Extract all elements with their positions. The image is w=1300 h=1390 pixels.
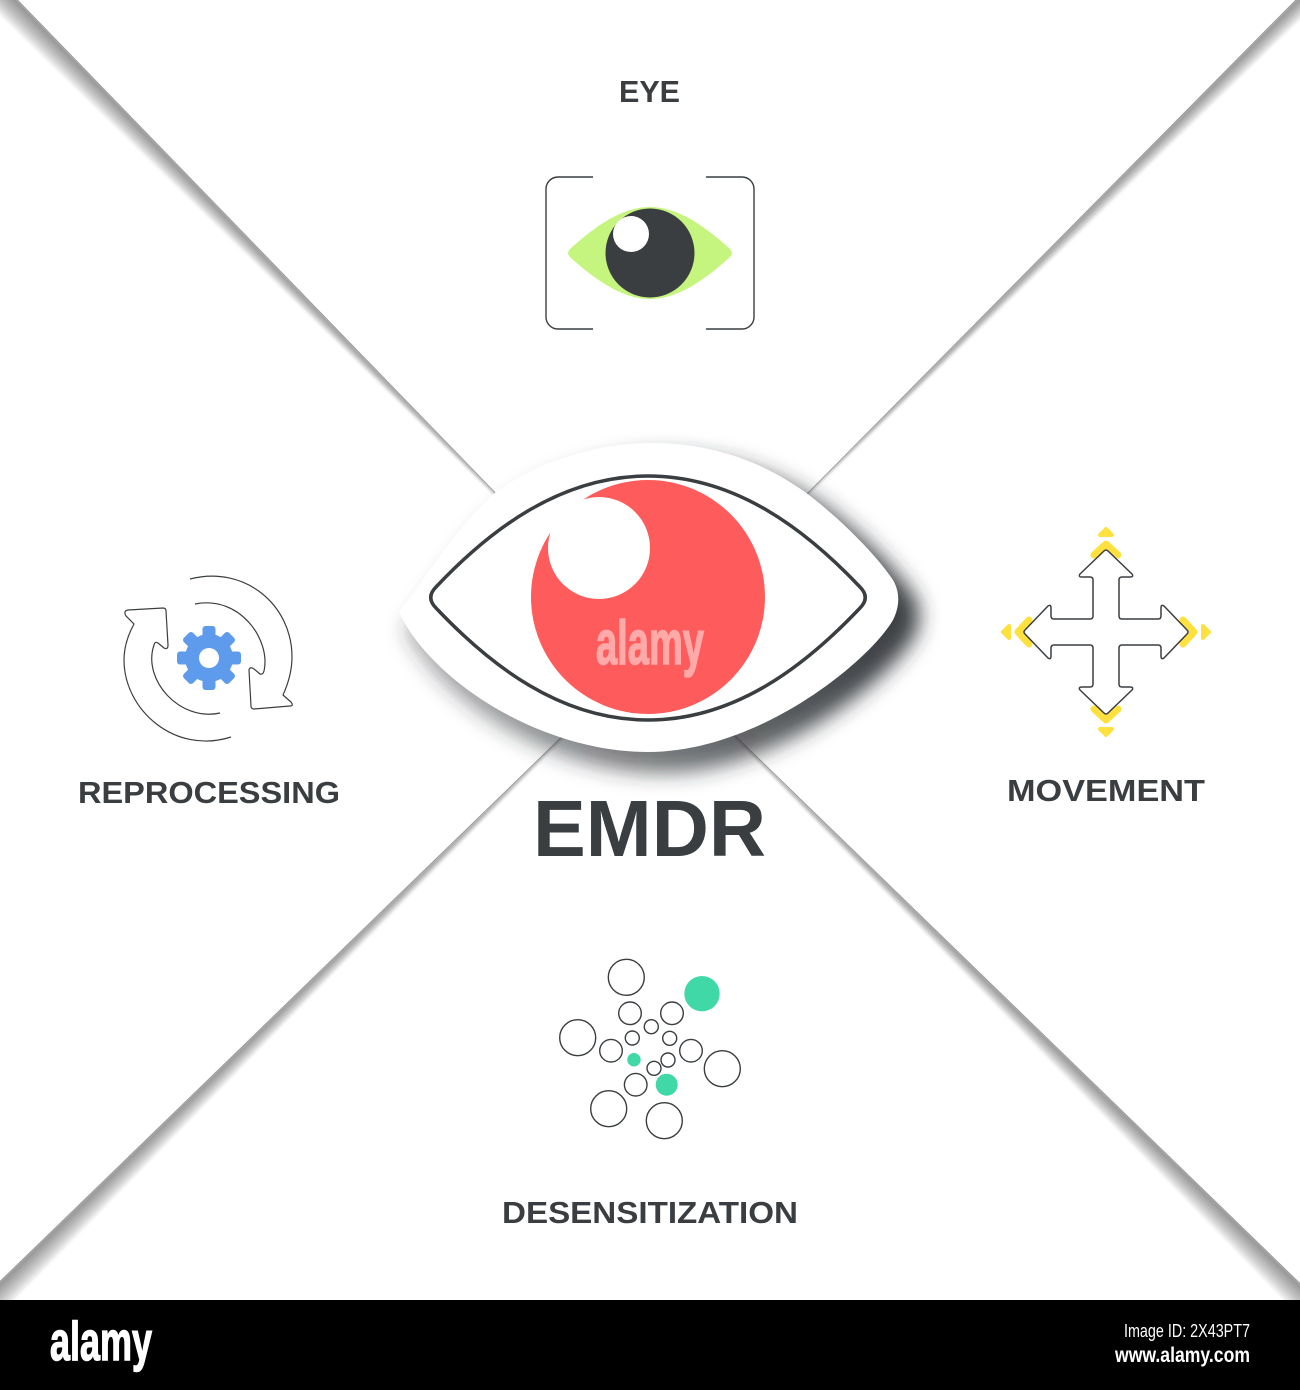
eye outline <box>431 476 865 720</box>
dark iris <box>606 208 694 298</box>
divider: bottom-left diagonal fold <box>0 738 564 1300</box>
central eye emblem <box>399 443 919 773</box>
heading: movement: MOVEMENT <box>1007 773 1205 808</box>
icon: reprocessing arrows and gear <box>124 576 292 741</box>
yellow chevrons and triangles <box>1018 544 1194 720</box>
footer logo: alamy <box>50 1310 152 1372</box>
website: www.alamy.com <box>1114 1344 1250 1367</box>
arrow outline <box>1024 550 1188 714</box>
cycle arrows <box>190 576 292 709</box>
title: EMDR <box>533 784 766 873</box>
heading: eye: EYE <box>619 74 680 109</box>
watermark on iris: alamy <box>596 609 704 678</box>
red iris <box>531 480 765 714</box>
divider: top-left diagonal fold <box>0 0 496 494</box>
blue gear <box>177 626 241 690</box>
image id: Image ID: 2X43PT7 <box>1124 1321 1250 1341</box>
icon: dispersing circles <box>560 959 740 1139</box>
emblem white sticker <box>399 443 898 752</box>
icon: eye in viewfinder <box>546 177 754 329</box>
emblem drop shadow <box>405 455 919 773</box>
viewfinder brackets <box>546 177 754 329</box>
divider: top-right diagonal fold <box>807 0 1300 495</box>
divider: bottom-right diagonal fold <box>734 735 1300 1300</box>
heading: reprocessing: REPROCESSING <box>78 775 340 810</box>
eye highlight <box>613 216 649 252</box>
outlined circles <box>560 959 740 1139</box>
icon: four-way arrow <box>1003 529 1209 735</box>
iris highlight <box>548 497 650 599</box>
heading: desensitization: DESENSITIZATION <box>502 1195 798 1230</box>
green eye shape <box>568 207 732 299</box>
footer bar <box>0 1300 1300 1390</box>
green circles <box>627 976 720 1096</box>
